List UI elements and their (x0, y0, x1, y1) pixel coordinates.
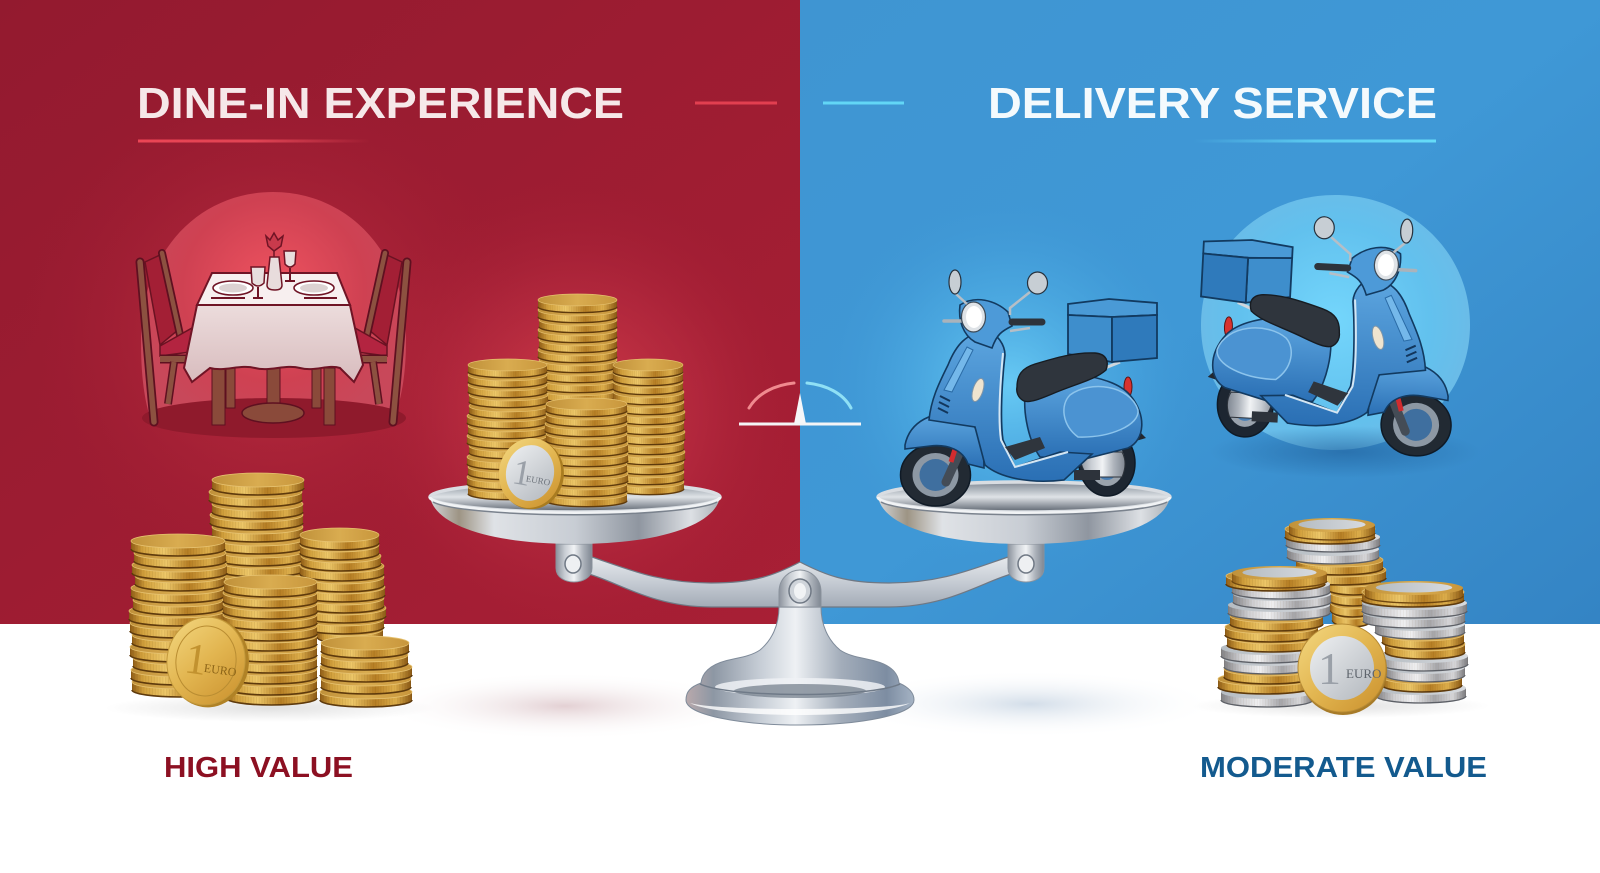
floor shadow: red (375, 672, 755, 740)
coin stack: high value (105, 473, 435, 722)
bimetal one euro coin (1298, 624, 1387, 715)
right pan inside (878, 482, 1170, 512)
scale beam (585, 557, 1015, 607)
heading underline: dine-in (138, 140, 370, 142)
euro coin on pan: 1 (510, 451, 534, 494)
euro coin on pan: EURO (525, 473, 551, 488)
label: high value: HIGH VALUE (164, 752, 353, 784)
left pan inside (430, 482, 720, 512)
large one euro coin: 1 (182, 633, 210, 685)
left stack (129, 534, 228, 697)
pivot (779, 570, 821, 607)
stack shadow (105, 694, 435, 722)
right hanger (1008, 544, 1044, 582)
front stack (545, 398, 628, 507)
panel: dine-in red background (0, 0, 800, 624)
icon: left chair (140, 253, 192, 422)
heading: delivery service: DELIVERY SERVICE (988, 79, 1437, 128)
coin stack on scale pan (467, 294, 685, 514)
left stack (467, 359, 548, 500)
vase with flower and glasses (251, 233, 296, 298)
gauge indicator (739, 383, 861, 426)
scale base and post (686, 607, 914, 725)
center accent line: blue (823, 102, 904, 104)
tablecloth (184, 273, 363, 382)
right stack (1362, 581, 1468, 703)
euro coin on pan (493, 433, 570, 514)
label: moderate value: MODERATE VALUE (1200, 752, 1487, 784)
left hanger (556, 544, 592, 582)
heading underline: delivery (1194, 140, 1436, 142)
floor shadow: blue (840, 670, 1220, 738)
right stack (300, 528, 386, 644)
table legs and pedestal (212, 368, 335, 425)
left stack (1218, 566, 1331, 707)
icon backdrop: red spotlight (141, 192, 406, 418)
balance scale (430, 482, 1170, 725)
center accent line: red (695, 102, 777, 104)
scooter (1193, 209, 1462, 458)
large one euro coin (161, 612, 255, 713)
right stack (613, 359, 685, 495)
place settings (211, 281, 337, 298)
back stack (1285, 518, 1386, 627)
spotlight circle (1201, 195, 1470, 450)
right pan front rim and bowl (878, 497, 1170, 544)
icon: dining table with chairs (140, 192, 407, 438)
icon: delivery scooter spotlight (1193, 195, 1480, 478)
large one euro coin: EURO (203, 661, 238, 679)
icon: right chair (355, 253, 407, 422)
scooter ground shadow (1210, 426, 1480, 478)
left pan bowl (430, 497, 720, 544)
bimetal one euro coin: EURO (1346, 666, 1381, 681)
back stack (538, 294, 617, 403)
heading: dine-in experience: DINE-IN EXPERIENCE (137, 79, 624, 128)
front stack (223, 575, 317, 705)
bimetal one euro coin: 1 (1318, 643, 1341, 694)
coin stack: moderate value (1190, 518, 1490, 718)
panel: white floor (0, 624, 1600, 873)
icon: delivery scooter on pan (900, 270, 1157, 506)
back stack (209, 473, 305, 600)
icon floor shadow (142, 398, 406, 438)
small stack (320, 636, 412, 707)
panel: delivery blue background (800, 0, 1600, 624)
stack shadow (1190, 694, 1490, 718)
